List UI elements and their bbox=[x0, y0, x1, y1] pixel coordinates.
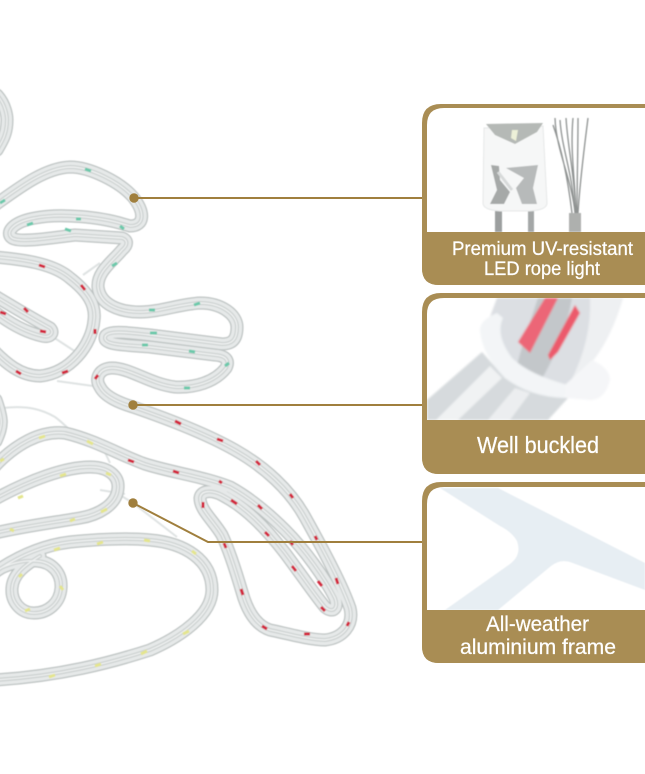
rope tube body bbox=[0, 95, 351, 680]
rope highlight bbox=[0, 95, 351, 680]
photo: buckled rope tube bbox=[427, 298, 623, 420]
panel: All-weather aluminium frame bbox=[422, 482, 645, 663]
caption text: All-weather bbox=[486, 613, 589, 636]
photo: wires and sleeve bbox=[553, 118, 588, 232]
green LEDs bbox=[0, 169, 229, 388]
callout leader: frame bbox=[128, 498, 424, 542]
red LEDs bbox=[0, 265, 349, 634]
photo: LED bulb bbox=[483, 123, 547, 232]
panel: All-weather aluminium frame: aluminium frame bbox=[460, 636, 616, 659]
thin white support wires bbox=[3, 263, 177, 537]
callout leader: rope light bbox=[129, 193, 424, 203]
yellow LEDs bbox=[0, 436, 196, 677]
callout leader: buckle bbox=[128, 400, 424, 410]
panel frame and caption bbox=[422, 293, 645, 474]
rope tube core bbox=[0, 95, 351, 680]
panel frame and caption bbox=[422, 482, 645, 663]
panel: Well buckled bbox=[422, 293, 645, 474]
rope tube outer edge bbox=[0, 95, 351, 680]
panel: Premium UV-resistant LED rope light bbox=[422, 104, 645, 285]
photo: white T-shaped frame bbox=[440, 488, 645, 610]
caption text: Well buckled bbox=[477, 432, 599, 458]
panel frame and caption bbox=[422, 104, 645, 285]
caption text: Premium UV-resistant bbox=[452, 239, 634, 260]
illustration: LED rope light reindeer shape bbox=[0, 95, 351, 680]
panel: Premium UV-resistant LED rope light: LED rope light bbox=[484, 259, 601, 280]
